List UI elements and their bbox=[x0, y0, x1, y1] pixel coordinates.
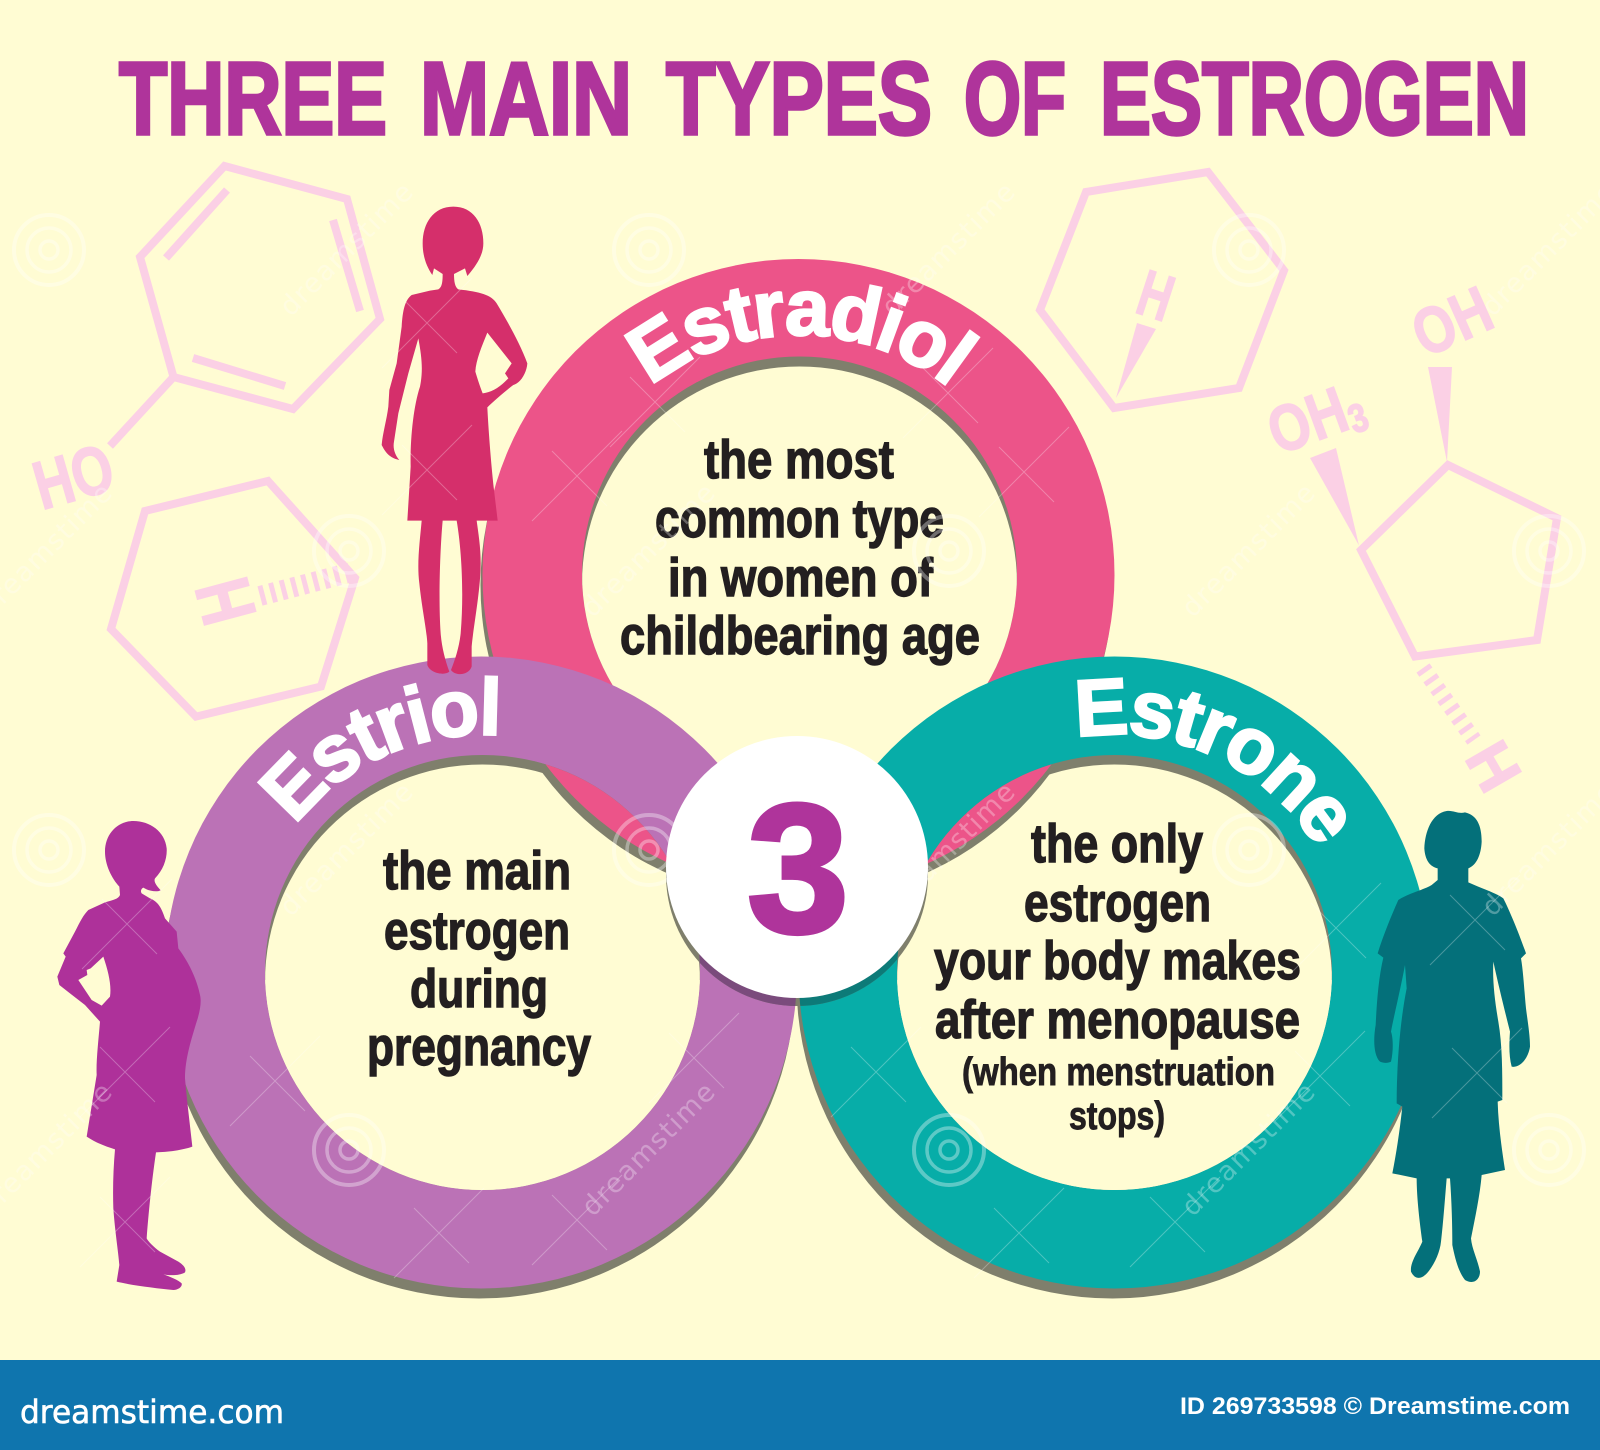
text: Estriol description bbox=[367, 841, 591, 1077]
molecule: right ring with OH, OH3 and H: OH bbox=[1401, 272, 1503, 371]
footer image id: ID 269733598 © Dreamstime.com bbox=[1180, 1393, 1570, 1420]
molecule: right ring with OH, OH3 and H bbox=[1258, 272, 1557, 803]
text: Estrone description: stops) bbox=[1069, 1095, 1165, 1138]
molecule: upper left ring with HO group: HO bbox=[25, 429, 122, 524]
text: Estradiol description: in women of bbox=[668, 548, 934, 608]
molecule: upper left ring with HO group bbox=[25, 166, 380, 524]
text: Estradiol description bbox=[620, 430, 980, 666]
text: Estrone description: your body makes bbox=[934, 931, 1301, 991]
watermark text: dreamstime bbox=[274, 777, 419, 922]
label: Estrone: Estrone bbox=[1077, 677, 1346, 842]
watermark text: dreamstime bbox=[576, 478, 721, 623]
text: Estrone description: (when menstruation bbox=[962, 1051, 1275, 1094]
molecule: lower left ring with H bbox=[111, 481, 355, 717]
text: Estradiol description: the most bbox=[704, 430, 894, 490]
watermark text bbox=[0, 177, 1600, 1222]
title: THREE bbox=[119, 41, 387, 156]
text: Estriol description: the main bbox=[383, 841, 571, 901]
molecule: upper right ring with wedge H bbox=[1040, 172, 1284, 408]
watermark text: dreamstime bbox=[1176, 1077, 1321, 1222]
text: Estrone description bbox=[934, 814, 1301, 1138]
footer bar bbox=[0, 1360, 1600, 1450]
molecule: right ring with OH, OH3 and H: OH bbox=[1258, 372, 1357, 468]
title: MAIN bbox=[420, 41, 632, 156]
text: Estradiol description: common type bbox=[655, 489, 944, 549]
molecule: lower left ring with H: H bbox=[178, 569, 273, 633]
title: OF bbox=[964, 41, 1066, 156]
center circle with number 3 bbox=[666, 736, 928, 1006]
molecule: right ring with OH, OH3 and H: 3 bbox=[1342, 394, 1374, 442]
text: Estriol description: during bbox=[410, 959, 548, 1019]
text: Estriol description: estrogen bbox=[384, 901, 570, 961]
panel: Estradiol ring bbox=[480, 259, 1114, 686]
molecule: right ring with OH, OH3 and H: H bbox=[1452, 730, 1534, 803]
watermark text: dreamstime bbox=[876, 777, 1021, 922]
title: TYPES bbox=[666, 41, 932, 156]
watermark text: dreamstime bbox=[1176, 478, 1321, 623]
text: Estrone description: after menopause bbox=[935, 990, 1300, 1050]
title bbox=[119, 41, 1529, 156]
watermark text: dreamstime bbox=[576, 1077, 721, 1222]
watermark text: dreamstime bbox=[876, 177, 1021, 322]
icon: pregnant woman silhouette bbox=[57, 821, 201, 1290]
label: Estradiol: Estradiol bbox=[624, 284, 980, 386]
icon: woman silhouette, childbearing age bbox=[382, 207, 527, 674]
footer logo: dreamstime.com bbox=[20, 1393, 284, 1431]
molecule: upper right ring with wedge H: H bbox=[1129, 256, 1183, 335]
label: Estriol: Estriol bbox=[256, 675, 498, 822]
panel: Estrone ring bbox=[798, 656, 1420, 1298]
text: Estradiol description: childbearing age bbox=[620, 606, 980, 666]
center circle with number 3: 3 bbox=[747, 765, 849, 971]
text: Estrone description: the only bbox=[1031, 814, 1203, 874]
icon: older woman silhouette bbox=[1374, 811, 1530, 1282]
text: Estriol description: pregnancy bbox=[367, 1017, 591, 1077]
text: Estrone description: estrogen bbox=[1024, 873, 1211, 933]
watermark text: dreamstime bbox=[274, 177, 419, 322]
panel: Estriol ring bbox=[168, 656, 796, 1298]
